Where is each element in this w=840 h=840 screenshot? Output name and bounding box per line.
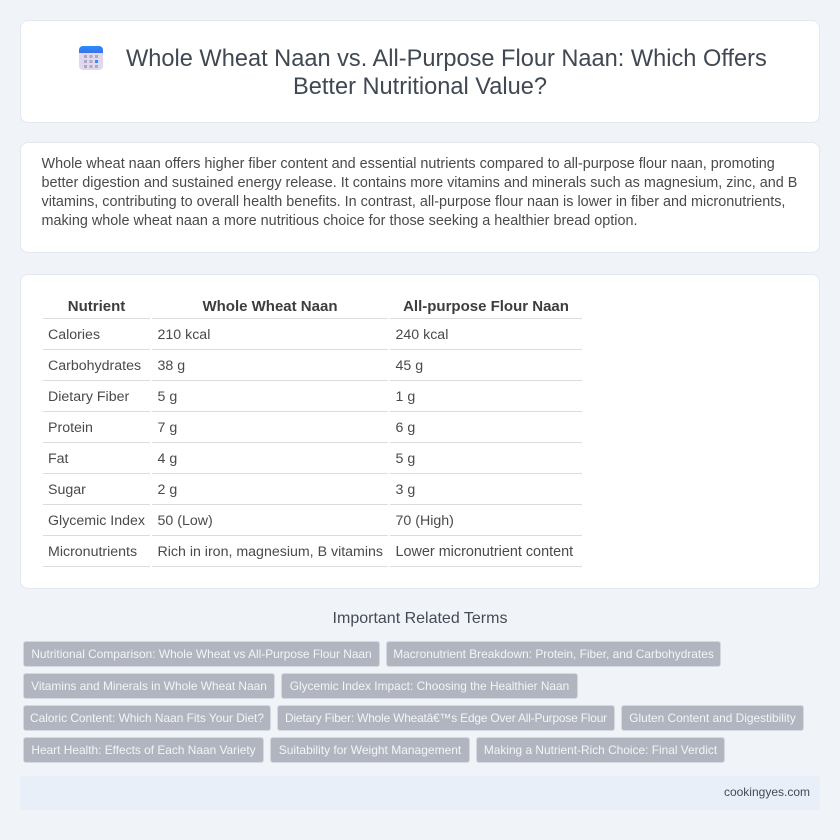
row: micronutrients: Lower micronutrient content xyxy=(396,544,573,560)
row: sugar: 2 g xyxy=(158,482,177,498)
tag xyxy=(621,705,804,731)
row: calories: Calories xyxy=(48,327,100,343)
tag xyxy=(386,641,721,667)
tag: Caloric Content: Which Naan Fits Your Diet? xyxy=(30,711,264,725)
text: summary paragraph: better digestion and sustained energy release. It contains more vitamins and minerals such as magnesium, zinc, and B xyxy=(42,175,797,191)
tag: Macronutrient Breakdown: Protein, Fiber, and Carbohydrates xyxy=(393,647,714,661)
row: calories xyxy=(48,327,448,343)
tag: Nutritional Comparison: Whole Wheat vs All-Purpose Flour Naan xyxy=(31,647,372,661)
tag: Glycemic Index Impact: Choosing the Healthier Naan xyxy=(290,679,569,693)
tag xyxy=(281,673,578,699)
row: fat xyxy=(48,451,415,467)
row: sugar: Sugar xyxy=(48,482,86,498)
text: summary paragraph: making whole wheat naan a more nutritious choice for those seeking a healthier bread option. xyxy=(42,213,637,229)
row: fat: 4 g xyxy=(158,451,177,467)
tag xyxy=(23,705,271,731)
row: protein: 7 g xyxy=(158,420,177,436)
row: carbohydrates: 38 g xyxy=(158,358,185,374)
tag: Vitamins and Minerals in Whole Wheat Naan xyxy=(31,679,267,693)
title xyxy=(126,46,767,100)
footer xyxy=(20,776,820,810)
text: summary paragraph: vitamins, contributing to overall health benefits. In contrast, all-purpose flour naan is lower in fiber and micronutrients, xyxy=(42,194,785,210)
table header: Whole Wheat Naan xyxy=(202,298,338,315)
row: micronutrients: Micronutrients xyxy=(48,544,137,560)
table header: Nutrient xyxy=(68,298,125,315)
row: glycemic index: Glycemic Index xyxy=(48,513,145,529)
tag xyxy=(23,641,380,667)
tag: Gluten Content and Digestibility xyxy=(629,711,796,725)
row: dietary fiber: 5 g xyxy=(158,389,177,405)
row: fat: 5 g xyxy=(396,451,415,467)
tag xyxy=(23,737,264,763)
title: Whole Wheat Naan vs. All-Purpose Flour Naan: Which Offers xyxy=(126,46,767,72)
row: protein: Protein xyxy=(48,420,93,436)
row: glycemic index xyxy=(48,513,454,529)
row: glycemic index: 50 (Low) xyxy=(158,513,213,529)
panel: summary xyxy=(20,142,820,253)
tag xyxy=(277,705,615,731)
row: micronutrients xyxy=(48,544,574,560)
tag: Heart Health: Effects of Each Naan Variety xyxy=(31,743,256,757)
tag xyxy=(270,737,470,763)
panel: header xyxy=(20,20,820,123)
title: Better Nutritional Value? xyxy=(293,74,547,100)
tag xyxy=(23,673,275,699)
heading: related terms: Important Related Terms xyxy=(333,610,507,627)
tag xyxy=(476,737,725,763)
row: fat: Fat xyxy=(48,451,68,467)
row: carbohydrates: 45 g xyxy=(396,358,423,374)
text: summary paragraph xyxy=(42,156,797,229)
row: protein xyxy=(48,420,415,436)
row: dietary fiber xyxy=(48,389,415,405)
text: summary paragraph: Whole wheat naan offers higher fiber content and essential nutrients compared to all-purpose flour naan, promoting xyxy=(42,156,775,172)
icon: calendar xyxy=(79,46,103,70)
tag: Suitability for Weight Management xyxy=(279,743,461,757)
row: protein: 6 g xyxy=(396,420,415,436)
related terms tags xyxy=(23,641,804,763)
panel: nutrition table xyxy=(20,274,820,589)
row: micronutrients: Rich in iron, magnesium, B vitamins xyxy=(158,544,383,560)
row: calories: 240 kcal xyxy=(396,327,448,343)
tag: Dietary Fiber: Whole Wheatâ€™s Edge Over All-Purpose Flour xyxy=(285,711,607,725)
row: glycemic index: 70 (High) xyxy=(396,513,454,529)
row: carbohydrates xyxy=(48,358,423,374)
row: sugar xyxy=(48,482,415,498)
footer credit: cookingyes.com xyxy=(724,785,810,799)
row: dietary fiber: 1 g xyxy=(396,389,415,405)
row: carbohydrates: Carbohydrates xyxy=(48,358,141,374)
row: sugar: 3 g xyxy=(396,482,415,498)
table header xyxy=(68,298,569,315)
row: dietary fiber: Dietary Fiber xyxy=(48,389,129,405)
row: calories: 210 kcal xyxy=(158,327,210,343)
table header: All-purpose Flour Naan xyxy=(403,298,569,315)
tag: Making a Nutrient-Rich Choice: Final Verdict xyxy=(484,743,717,757)
